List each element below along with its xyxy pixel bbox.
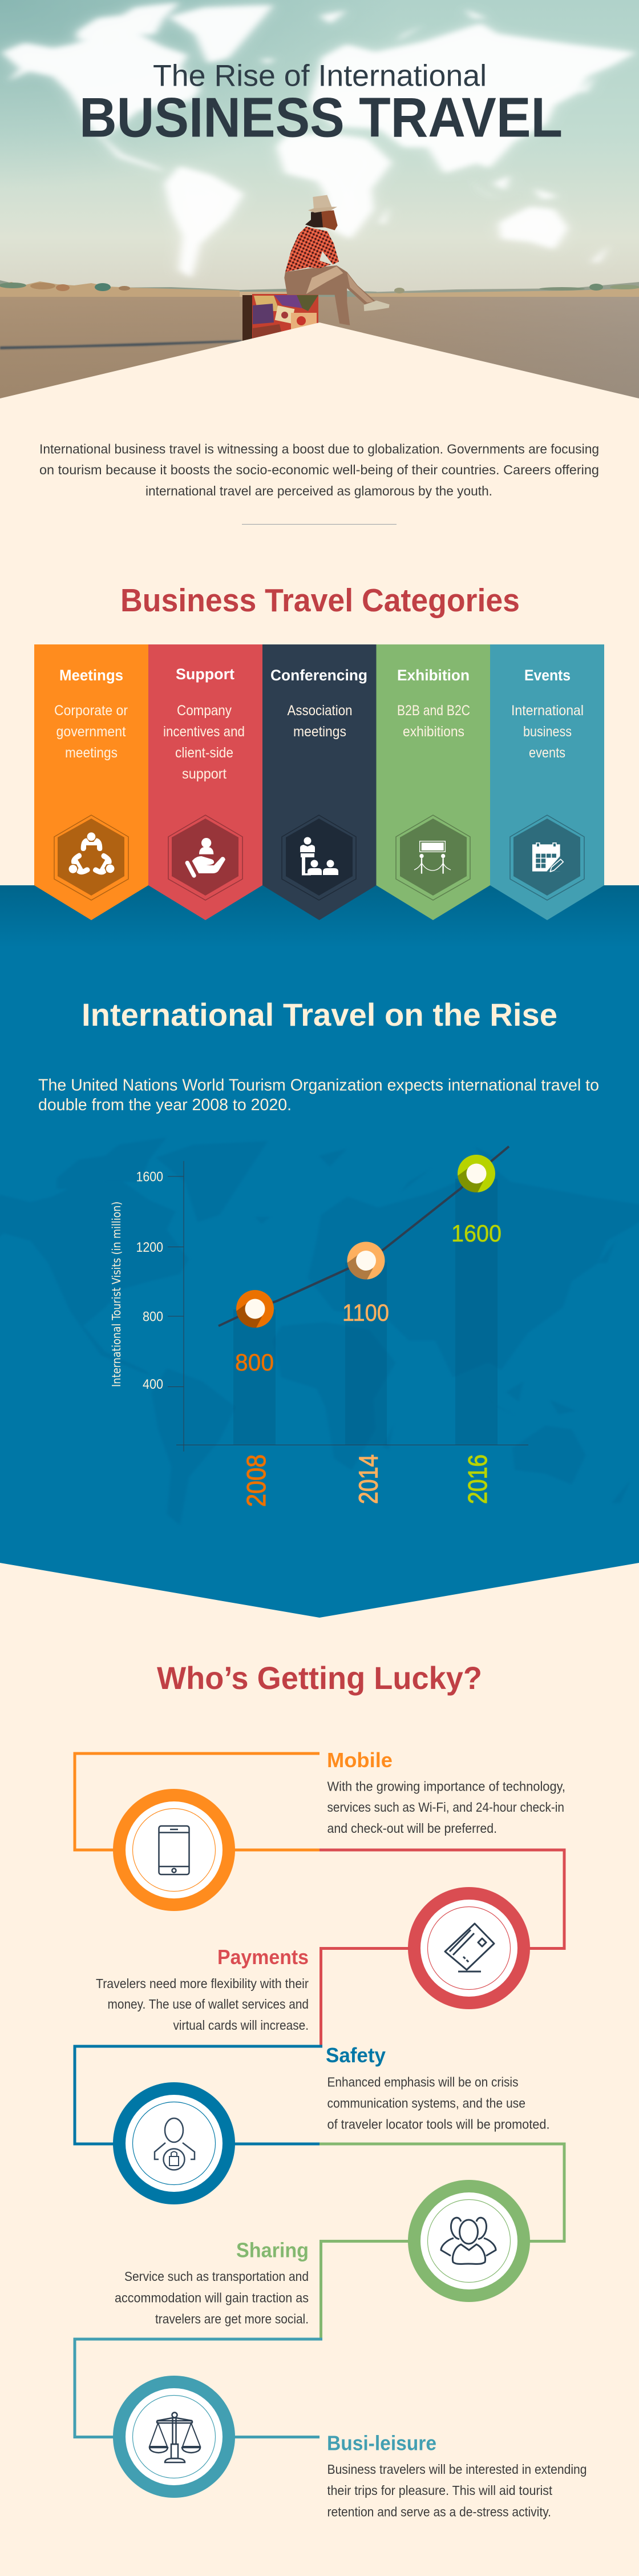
panel: support xyxy=(148,644,262,920)
text: safety: communication systems, and the use xyxy=(327,2096,525,2111)
point: 2014: 1100 xyxy=(342,1299,389,1326)
panel: meetings: government xyxy=(56,724,126,740)
faint world map xyxy=(0,1137,639,1525)
hero photo panel xyxy=(0,0,639,411)
icon: support hexagon xyxy=(168,815,242,900)
horizon hills xyxy=(0,280,377,298)
heading: international travel on the rise: International Travel on the Rise xyxy=(82,997,557,1033)
text: sharing xyxy=(115,2239,309,2327)
icon: phone xyxy=(159,1826,189,1874)
point: 2016: 1600 xyxy=(451,1220,502,1247)
cream chevron under hero xyxy=(0,322,639,417)
text: payments: Travelers need more flexibility with their xyxy=(96,1976,309,1991)
y axis title: International Tourist Visits (in million) xyxy=(110,1202,123,1387)
intro paragraph xyxy=(39,442,599,498)
panel: exhibition: B2B and B2C xyxy=(397,703,470,719)
y axis labels xyxy=(136,1169,163,1392)
text: safety xyxy=(326,2043,550,2131)
text: busi-leisure xyxy=(327,2432,587,2519)
heading: business travel categories: Business Travel Categories xyxy=(120,582,520,619)
panel: meetings: Corporate or xyxy=(54,703,128,719)
panel: support: incentives and xyxy=(163,724,245,740)
icon: group of people xyxy=(441,2218,496,2264)
item: sharing xyxy=(115,2180,530,2327)
intro paragraph: on tourism because it boosts the socio-economic well-being of their countries. Careers offering xyxy=(39,462,599,477)
item: busi-leisure xyxy=(113,2376,587,2519)
icon: exhibition hexagon xyxy=(396,815,470,900)
panel: support: Support xyxy=(176,666,234,683)
panel: conferencing: meetings xyxy=(293,724,346,740)
blue section background xyxy=(0,885,639,1618)
panel: meetings: Meetings xyxy=(59,667,123,684)
paragraph: UNWTO expectation: The United Nations World Tourism Organization expects international travel to xyxy=(38,1077,599,1095)
panel: exhibition xyxy=(377,644,490,920)
point: 2016 xyxy=(451,1155,502,1247)
panel: events: International xyxy=(511,703,584,719)
y axis labels: 400 xyxy=(143,1377,163,1392)
panel: events xyxy=(490,644,604,920)
text: busi-leisure: retention and serve as a de-stress activity. xyxy=(327,2505,551,2519)
x axis years: 2016 xyxy=(463,1454,492,1504)
trend line xyxy=(219,1146,509,1326)
panel: exhibition: exhibitions xyxy=(403,724,464,740)
panel: conferencing: Association xyxy=(288,703,353,719)
text: sharing: travelers are get more social. xyxy=(155,2312,309,2327)
text: sharing: Service such as transportation and xyxy=(124,2269,309,2284)
panel: conferencing xyxy=(262,644,377,920)
road shadow xyxy=(0,340,242,349)
bars xyxy=(233,1179,498,1445)
text: busi-leisure: their trips for pleasure. This will aid tourist xyxy=(327,2483,553,2498)
text: busi-leisure: Business travelers will be interested in extending xyxy=(327,2462,587,2477)
y axis labels: 1200 xyxy=(136,1240,163,1255)
item: payments xyxy=(96,1887,530,2033)
panel: events: events xyxy=(529,745,565,761)
panel: events: Events xyxy=(524,667,571,684)
intro paragraph: International business travel is witnessing a boost due to globalization. Governments are focusing xyxy=(39,442,599,457)
panel: support: Company xyxy=(177,703,232,719)
text: safety: Safety xyxy=(326,2043,386,2067)
icon: credit card xyxy=(445,1924,494,1972)
road xyxy=(0,297,639,411)
text: safety: of traveler locator tools will be promoted. xyxy=(327,2117,550,2131)
heading: who's getting lucky: Who’s Getting Lucky? xyxy=(157,1660,482,1696)
text: payments xyxy=(96,1945,309,2033)
vegetation strip xyxy=(0,281,639,299)
icon: conferencing hexagon xyxy=(282,815,356,900)
paragraph: UNWTO expectation: double from the year 2008 to 2020. xyxy=(38,1096,292,1114)
item: safety xyxy=(113,2043,550,2204)
item: mobile xyxy=(113,1748,565,1911)
text: mobile xyxy=(327,1748,565,1836)
icon: events hexagon xyxy=(510,815,584,900)
world map clouds xyxy=(2,3,636,278)
text: mobile: Mobile xyxy=(327,1748,393,1772)
icon: meetings hexagon xyxy=(54,815,128,900)
panel: conferencing: Conferencing xyxy=(270,667,367,684)
paragraph: UNWTO expectation xyxy=(38,1077,599,1114)
text: payments: money. The use of wallet services and xyxy=(107,1997,309,2011)
panel: support: support xyxy=(182,766,227,782)
intro paragraph: international travel are perceived as glamorous by the youth. xyxy=(145,483,492,498)
panel: meetings: meetings xyxy=(65,745,118,761)
panel: meetings xyxy=(34,644,148,920)
hero title: The Rise of International xyxy=(153,59,487,92)
panel: exhibition: Exhibition xyxy=(397,667,470,684)
traveller figure xyxy=(284,195,390,325)
text: safety: Enhanced emphasis will be on crisis xyxy=(327,2074,518,2089)
x axis years: 2008 xyxy=(241,1454,271,1507)
point: 2014 xyxy=(342,1242,389,1326)
line chart: tourist visits xyxy=(110,1146,528,1507)
y axis labels: 1600 xyxy=(136,1169,163,1185)
text: mobile: With the growing importance of technology, xyxy=(327,1779,565,1793)
panel: events: business xyxy=(523,724,572,740)
text: payments: Payments xyxy=(217,1945,309,1969)
panel: support: client-side xyxy=(175,745,233,761)
text: mobile: services such as Wi-Fi, and 24-hour check-in xyxy=(327,1800,564,1815)
hero title: BUSINESS TRAVEL xyxy=(79,86,563,148)
x axis years: 2014 xyxy=(354,1454,383,1504)
y axis labels: 800 xyxy=(143,1309,163,1324)
text: busi-leisure: Busi-leisure xyxy=(327,2432,436,2454)
timeline connectors xyxy=(75,1753,564,2437)
text: mobile: and check-out will be preferred. xyxy=(327,1821,497,1836)
point: 2008: 800 xyxy=(235,1349,274,1376)
hero title xyxy=(79,59,563,148)
text: sharing: accommodation will gain traction as xyxy=(115,2290,309,2305)
x axis years xyxy=(241,1454,492,1507)
text: payments: virtual cards will increase. xyxy=(173,2018,309,2033)
icon: person with lock xyxy=(155,2118,195,2170)
suitcase xyxy=(242,294,318,348)
point: 2008 xyxy=(236,1290,274,1371)
text: sharing: Sharing xyxy=(236,2239,309,2261)
axes xyxy=(168,1161,528,1452)
icon: scales xyxy=(149,2412,200,2462)
